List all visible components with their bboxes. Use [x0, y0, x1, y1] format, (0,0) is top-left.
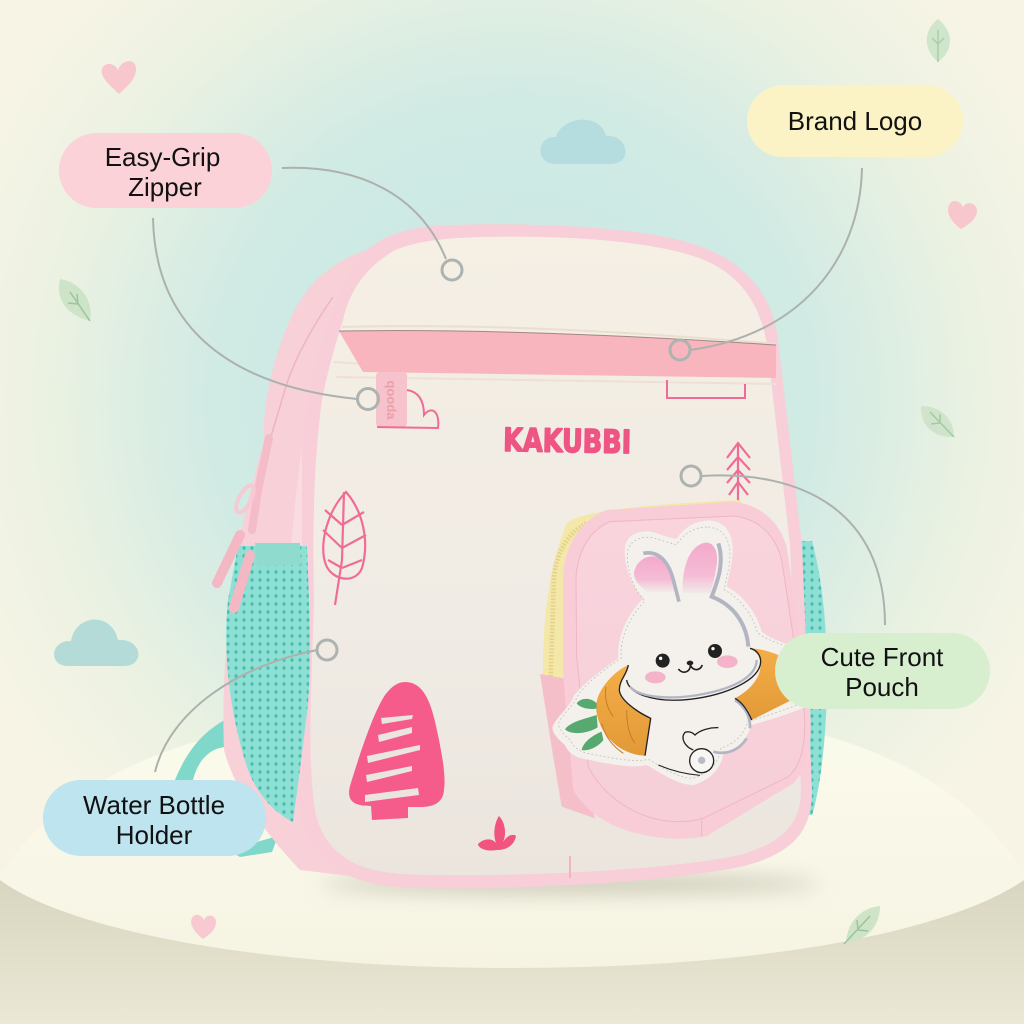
icon: heart bottom — [191, 915, 216, 939]
zipper pulls — [217, 438, 269, 608]
bunny ears — [634, 556, 677, 592]
callout lines — [153, 168, 885, 772]
callout dots — [317, 260, 701, 660]
main cream panel — [310, 237, 801, 875]
label: water bottle holder — [43, 780, 266, 856]
icon: pink heart top left — [102, 61, 136, 94]
side zipper seam — [262, 297, 333, 470]
icon: leaf top right — [927, 19, 950, 62]
left mesh pocket — [226, 543, 310, 822]
sticker base — [552, 521, 807, 785]
ground shadow — [320, 874, 820, 894]
printed pink carrot — [349, 682, 445, 820]
printed cloud outline — [377, 390, 438, 428]
label: easy-grip zipper: Zipper — [128, 172, 202, 202]
sticker stitching — [559, 527, 800, 778]
bottom seam — [700, 820, 703, 837]
zipper pull tab — [376, 372, 407, 427]
bunny outline — [627, 648, 761, 700]
bunny face — [656, 654, 670, 668]
printed arrow tree — [727, 443, 750, 502]
dot: pouch — [681, 466, 701, 486]
line: easy-grip zipper top — [282, 168, 446, 259]
bunny tail — [690, 749, 714, 773]
line: brand logo — [690, 168, 862, 350]
bunny carrot patch — [552, 521, 807, 785]
pouch trim — [563, 502, 811, 839]
pocket line — [342, 326, 776, 344]
label: cute front pouch: Pouch — [845, 672, 919, 702]
label: water bottle holder: Holder — [116, 820, 193, 850]
line: water bottle holder — [155, 650, 317, 772]
zipper pull tab: qooda — [384, 380, 399, 420]
printed small sprout — [478, 816, 516, 851]
back side panel — [223, 250, 400, 882]
icon: heart right — [948, 201, 977, 229]
carrot leaves — [565, 699, 603, 750]
printed leaf outline — [323, 492, 366, 605]
pink pocket flap — [339, 331, 776, 378]
printed bracket outline — [667, 380, 745, 398]
yellow zipper panel — [543, 500, 750, 680]
pouch side flap — [540, 674, 595, 818]
label: brand logo: Brand Logo — [788, 106, 922, 136]
bunny shading — [643, 553, 679, 602]
dot: top fabric — [442, 260, 462, 280]
label: easy-grip zipper: Easy-Grip — [105, 142, 220, 172]
printed brand logo: KAKUBBI — [503, 421, 631, 461]
side light band — [300, 290, 352, 545]
backpack — [175, 224, 827, 894]
pouch face — [576, 516, 805, 822]
main body trim — [295, 224, 812, 888]
icon: cloud left — [54, 619, 138, 666]
dot: zipper tab — [358, 388, 378, 410]
dot: bottle holder — [317, 640, 337, 660]
icon: cloud top — [540, 120, 625, 164]
label: water bottle holder: Water Bottle — [83, 790, 225, 820]
label: cute front pouch — [775, 633, 990, 709]
right mesh pocket — [801, 541, 827, 815]
label: brand logo — [747, 85, 963, 157]
carrot right — [735, 648, 792, 720]
carrot left — [596, 665, 651, 756]
bottom seam — [569, 856, 571, 878]
label: easy-grip zipper — [59, 133, 272, 208]
icon: leaf left — [59, 279, 91, 321]
line: easy-grip zipper bottom — [153, 218, 357, 399]
icon: leaf bottom right — [844, 906, 880, 944]
dot: brand logo strip — [670, 340, 690, 360]
line: cute front pouch — [702, 475, 885, 625]
icon: leaf right — [921, 406, 954, 437]
front pouch — [540, 500, 811, 839]
teal shoulder strap — [175, 717, 278, 857]
label: cute front pouch: Cute Front — [821, 642, 944, 672]
